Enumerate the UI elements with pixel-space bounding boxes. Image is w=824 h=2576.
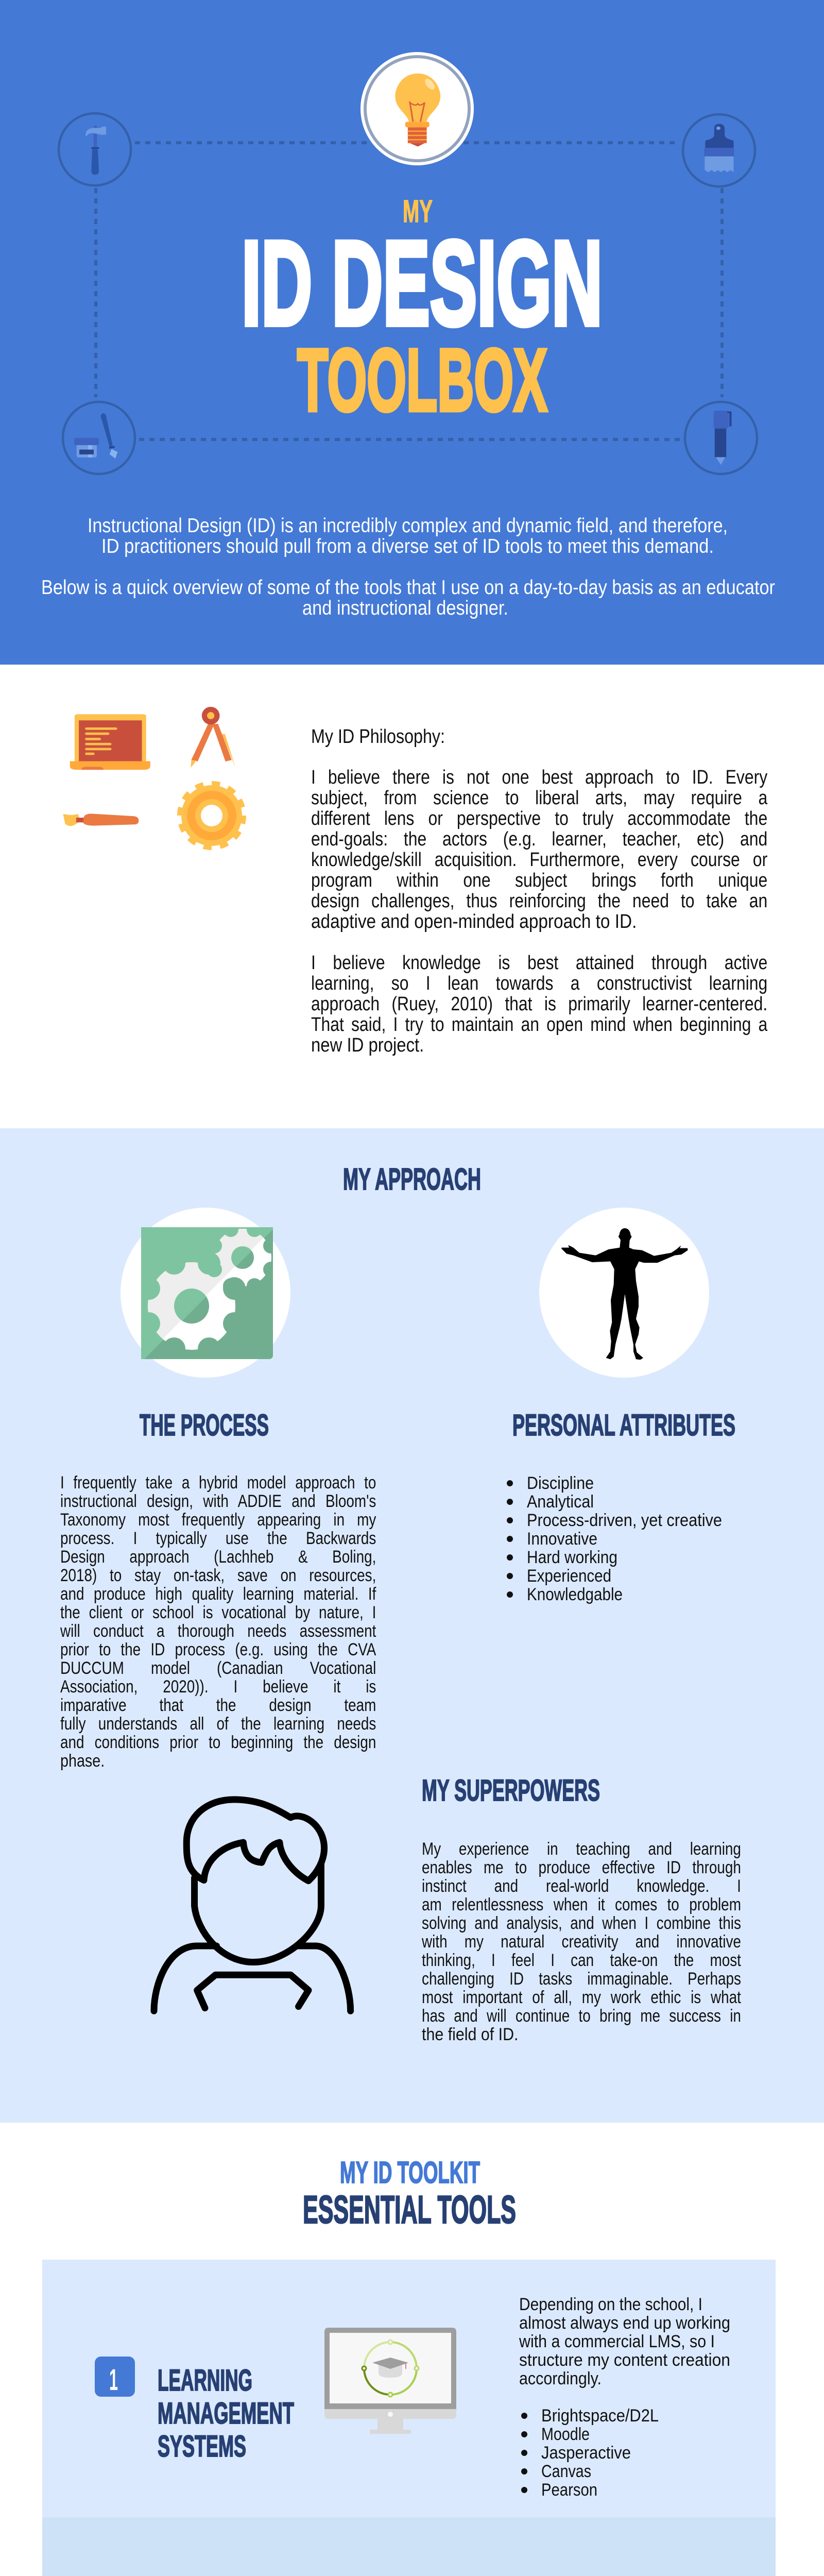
my superpowers paragraph: am relentlessness when it comes to problem bbox=[422, 1895, 741, 1914]
panel: my approach bbox=[0, 1128, 824, 2123]
philosophy paragraph one: program within one subject brings forth unique bbox=[311, 870, 767, 891]
icon: paint brush horizontal bbox=[63, 814, 139, 826]
the process paragraph: process. I typically use the Backwards bbox=[60, 1529, 376, 1548]
philosophy heading: My ID Philosophy: bbox=[311, 726, 445, 748]
list: personal attributes: Experienced bbox=[527, 1566, 611, 1586]
list: personal attributes: Knowledgable bbox=[527, 1585, 623, 1604]
icon: hammer bbox=[59, 113, 131, 185]
my superpowers paragraph: with my natural creativity and innovative bbox=[422, 1932, 741, 1952]
the process paragraph: Association, 2020)). I believe it is bbox=[60, 1677, 376, 1697]
icon: person outline bbox=[154, 1800, 351, 2011]
title: TOOLBOX bbox=[297, 331, 547, 430]
my superpowers paragraph: My experience in teaching and learning bbox=[422, 1839, 741, 1859]
philosophy paragraph two: learning, so I lean towards a constructivist learning bbox=[311, 973, 767, 994]
icon: drawing compass bbox=[191, 707, 235, 768]
number badge 1: 1 bbox=[109, 2363, 118, 2397]
the process paragraph: will conduct a thorough needs assessment bbox=[60, 1621, 376, 1641]
list: personal attributes bbox=[507, 1473, 722, 1604]
the process paragraph: prior to the ID process (e.g. using the CVA bbox=[60, 1640, 376, 1659]
heading: my approach: MY APPROACH bbox=[343, 1162, 481, 1196]
title bbox=[242, 194, 603, 430]
intro text bbox=[41, 515, 775, 619]
the process paragraph bbox=[60, 1473, 376, 1771]
row list: Pearson bbox=[541, 2480, 597, 2500]
list: personal attributes: Innovative bbox=[527, 1529, 597, 1549]
philosophy paragraph one: knowledge/skill acquisition. Furthermore, every course or bbox=[311, 849, 767, 871]
the process paragraph: Design approach (Lachheb & Boling, bbox=[60, 1547, 376, 1567]
row list: Brightspace/D2L bbox=[541, 2406, 659, 2426]
the process paragraph: imparative that the design team bbox=[60, 1696, 376, 1715]
heading: my superpowers: MY SUPERPOWERS bbox=[422, 1774, 600, 1807]
row list: Canvas bbox=[541, 2462, 591, 2481]
intro text: Instructional Design (ID) is an incredibly complex and dynamic field, and therefore, bbox=[88, 515, 728, 537]
row text bbox=[519, 2295, 730, 2388]
panel: hero header bbox=[0, 0, 824, 665]
number badge 1 bbox=[95, 2357, 135, 2397]
icon: human silhouette on white circle bbox=[539, 1208, 709, 1378]
icon: monitor with graduation cap bbox=[324, 2328, 456, 2434]
my superpowers paragraph: the field of ID. bbox=[422, 2025, 519, 2044]
the process paragraph: and produce high quality learning material. If bbox=[60, 1584, 376, 1604]
the process paragraph: fully understands all of the learning needs bbox=[60, 1714, 376, 1734]
intro text: and instructional designer. bbox=[302, 597, 508, 619]
icon: gear bbox=[180, 784, 244, 848]
heading: my id toolkit: MY ID TOOLKIT bbox=[340, 2156, 480, 2190]
intro text: ID practitioners should pull from a diverse set of ID tools to meet this demand. bbox=[101, 535, 714, 557]
row 1: learning management systems bbox=[42, 2260, 776, 2517]
philosophy paragraph one bbox=[311, 767, 767, 933]
row list: Moodle bbox=[541, 2425, 590, 2444]
the process paragraph: I frequently take a hybrid model approach to bbox=[60, 1473, 376, 1493]
row heading: SYSTEMS bbox=[158, 2430, 246, 2463]
philosophy paragraph two: approach (Ruey, 2010) that is primarily learner-centered. bbox=[311, 993, 767, 1015]
row list: Jasperactive bbox=[541, 2443, 631, 2463]
the process paragraph: 2018) to stay on-task, save on resources, bbox=[60, 1566, 376, 1585]
row text: structure my content creation bbox=[519, 2350, 730, 2370]
my superpowers paragraph: solving and analysis, and when I combine this bbox=[422, 1913, 741, 1933]
my superpowers paragraph: challenging ID tasks immaginable. Perhaps bbox=[422, 1969, 741, 1989]
row 2: premium suites bbox=[42, 2517, 776, 2576]
philosophy paragraph one: adaptive and open-minded approach to ID. bbox=[311, 911, 637, 933]
my superpowers paragraph: thinking, I feel I can take-on the most bbox=[422, 1951, 741, 1970]
philosophy paragraph one: I believe there is not one best approach to ID. Every bbox=[311, 767, 767, 788]
philosophy paragraph one: subject, from science to liberal arts, may require a bbox=[311, 787, 767, 809]
my superpowers paragraph: has and will continue to bring me success in bbox=[422, 2006, 741, 2026]
row heading: MANAGEMENT bbox=[158, 2397, 294, 2430]
philosophy paragraph one: different lens or perspective to truly accommodate the bbox=[311, 808, 767, 829]
the process paragraph: Taxonomy most frequently appearing in my bbox=[60, 1510, 376, 1530]
icon: ink and fountain pen bbox=[63, 402, 135, 474]
row text: accordingly. bbox=[519, 2369, 602, 2388]
list: personal attributes: Process-driven, yet creative bbox=[527, 1511, 722, 1530]
icon: light bulb badge bbox=[360, 52, 474, 165]
the process paragraph: the client or school is vocational by nature, I bbox=[60, 1603, 376, 1622]
list: personal attributes: Hard working bbox=[527, 1548, 617, 1567]
philosophy paragraph two bbox=[311, 952, 767, 1056]
icon: marker pen bbox=[685, 402, 757, 474]
philosophy paragraph one: end-goals: the actors (e.g. learner, teacher, etc) and bbox=[311, 828, 767, 850]
panel: toolkit bbox=[0, 2123, 824, 2576]
row text: with a commercial LMS, so I bbox=[519, 2332, 715, 2351]
icon: gears on white circle bbox=[121, 1208, 290, 1378]
philosophy paragraph two: new ID project. bbox=[311, 1035, 424, 1056]
the process paragraph: phase. bbox=[60, 1751, 105, 1771]
my superpowers paragraph: instinct and real-world knowledge. I bbox=[422, 1876, 741, 1896]
list: personal attributes: Analytical bbox=[527, 1492, 594, 1512]
the process paragraph: DUCCUM model (Canadian Vocational bbox=[60, 1658, 376, 1678]
heading: the process: THE PROCESS bbox=[140, 1409, 269, 1442]
heading: essential tools: ESSENTIAL TOOLS bbox=[303, 2188, 516, 2232]
philosophy paragraph one: design challenges, thus reinforcing the need to take an bbox=[311, 890, 767, 912]
icon: laptop bbox=[70, 714, 150, 770]
row heading: LEARNING bbox=[158, 2364, 252, 2397]
my superpowers paragraph: most important of all, my work ethic is what bbox=[422, 1988, 741, 2007]
row text: Depending on the school, I bbox=[519, 2295, 702, 2314]
my superpowers paragraph bbox=[422, 1839, 741, 2044]
icon: paint brush bbox=[683, 114, 755, 187]
the process paragraph: instructional design, with ADDIE and Bloom's bbox=[60, 1492, 376, 1511]
row text: almost always end up working bbox=[519, 2313, 730, 2333]
row heading bbox=[158, 2364, 294, 2463]
panel: philosophy bbox=[0, 665, 824, 1128]
philosophy paragraph two: I believe knowledge is best attained through active bbox=[311, 952, 767, 974]
row list bbox=[521, 2406, 659, 2500]
my superpowers paragraph: enables me to produce effective ID through bbox=[422, 1858, 741, 1877]
philosophy paragraph two: That said, I try to maintain an open mind when beginning a bbox=[311, 1014, 767, 1036]
list: personal attributes: Discipline bbox=[527, 1473, 594, 1493]
title: MY bbox=[403, 194, 433, 229]
the process paragraph: and conditions prior to beginning the design bbox=[60, 1733, 376, 1752]
